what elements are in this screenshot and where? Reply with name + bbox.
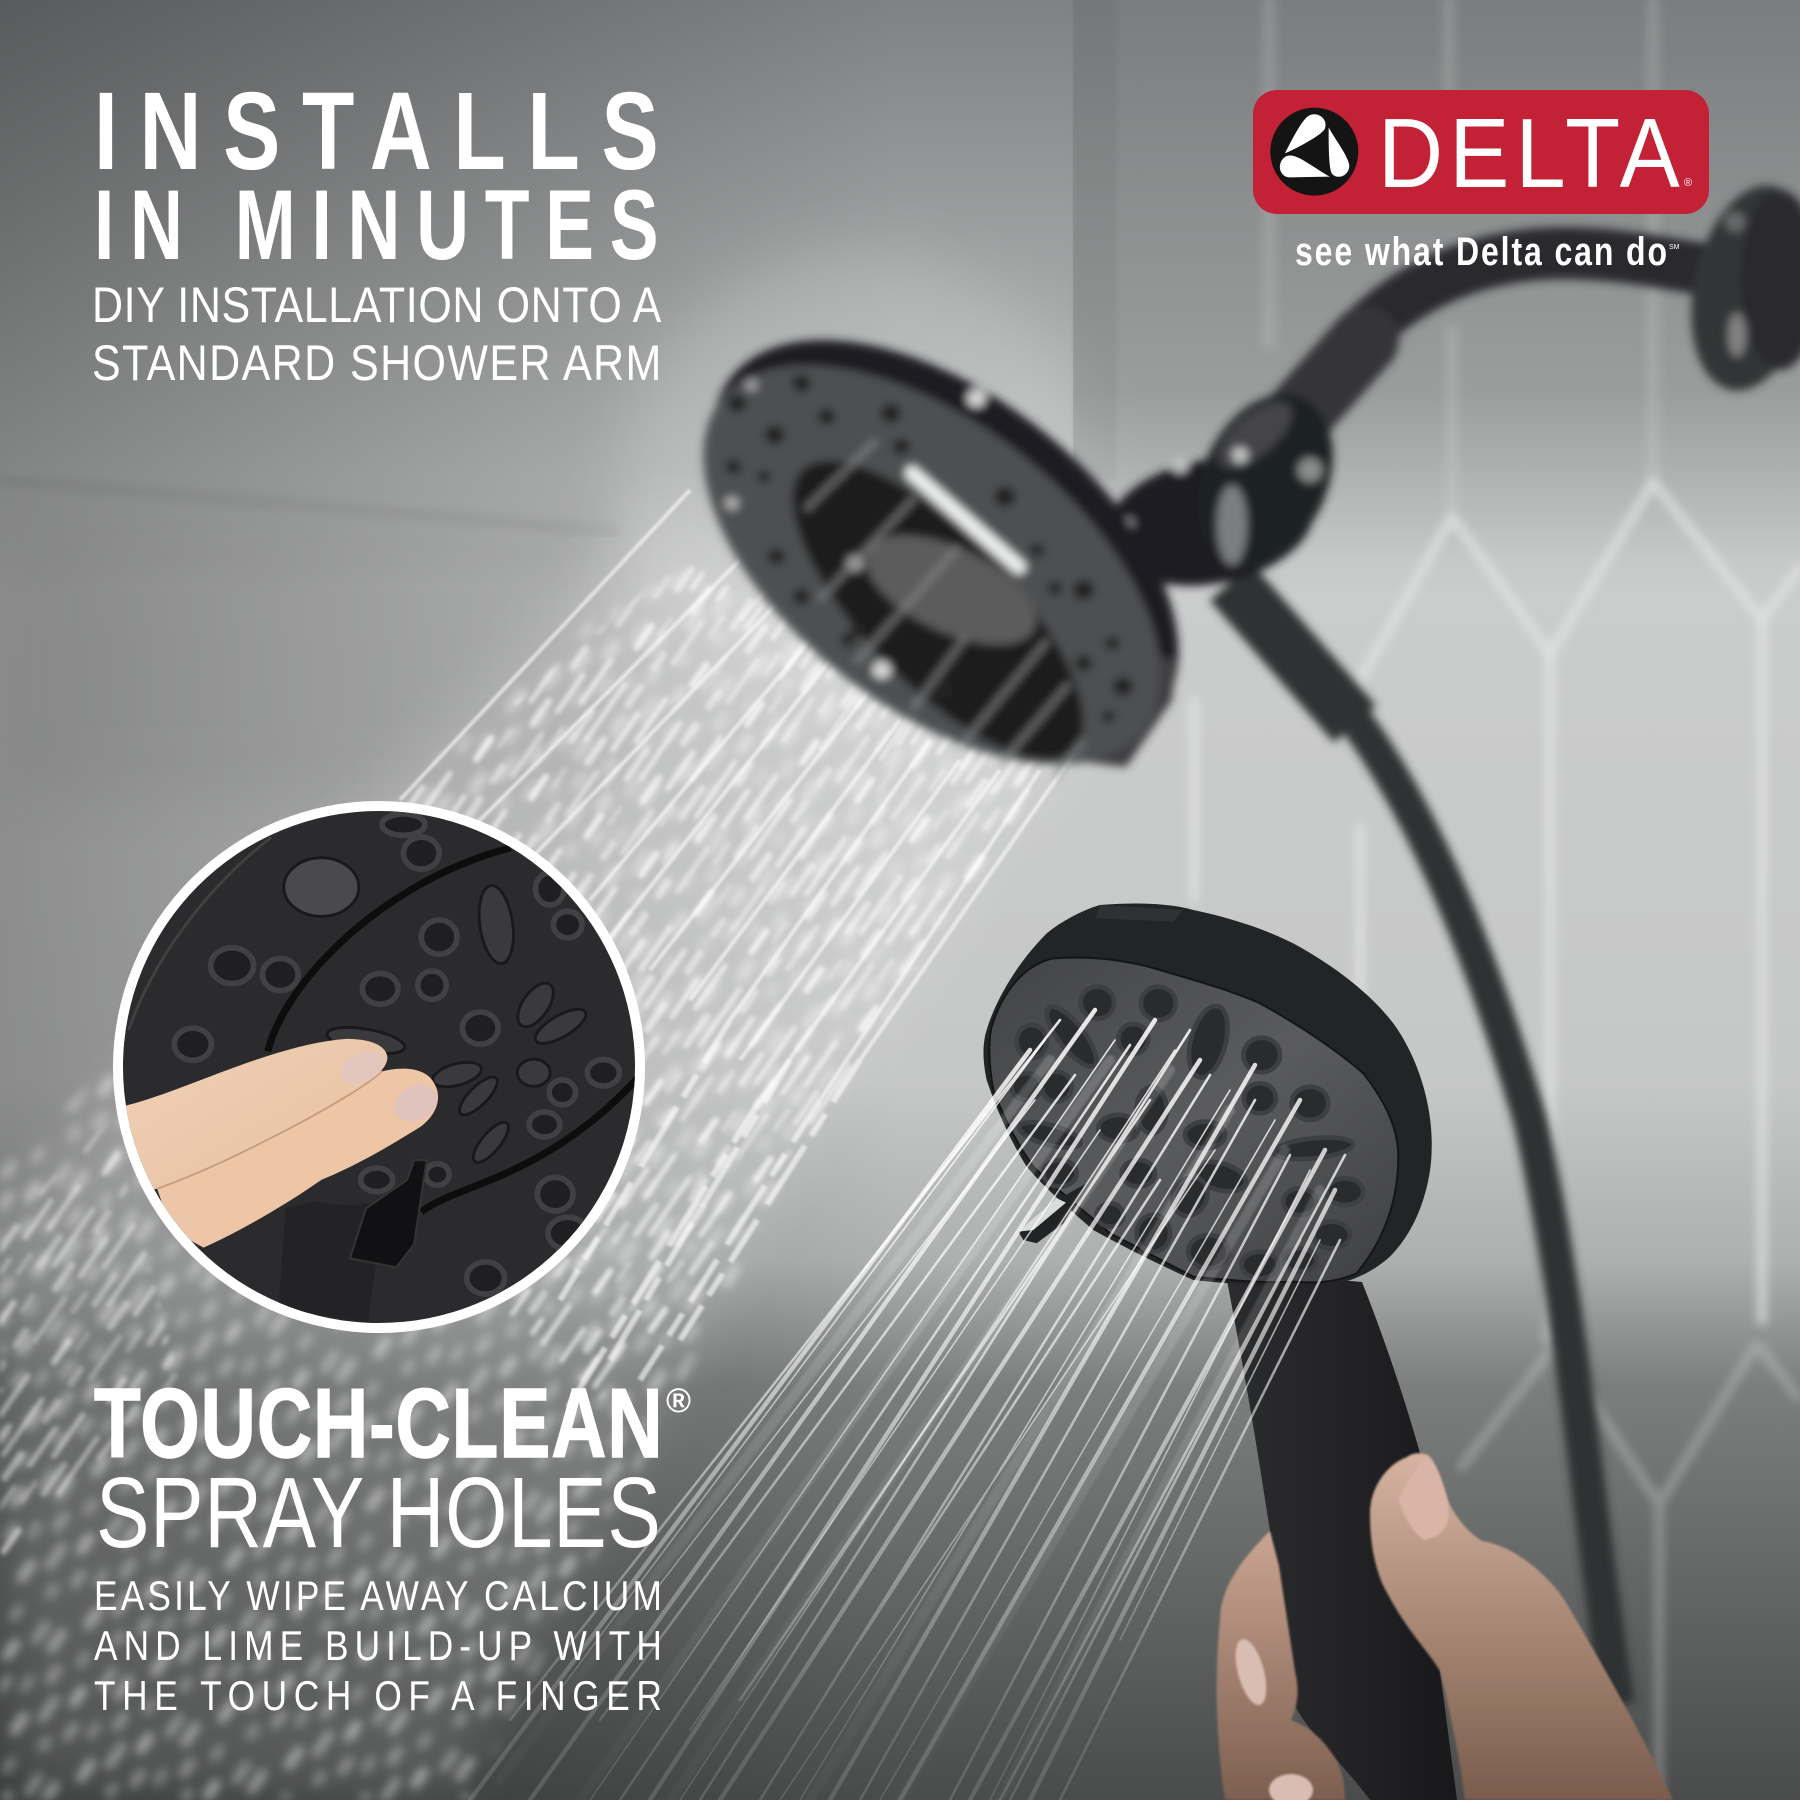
collar <box>1290 340 1365 425</box>
fingers <box>1217 1531 1345 1800</box>
body text: wipe away build-up <box>94 1573 662 1720</box>
hose connector sleeve <box>1231 582 1355 724</box>
circular inset: finger wiping spray holes <box>110 800 650 1340</box>
tagline: see what Delta can do <box>1295 229 1667 274</box>
thumb nail <box>1399 1458 1448 1540</box>
Delta logo <box>1253 90 1709 214</box>
heading: touch-clean spray holes: SPRAY HOLES <box>96 1458 661 1569</box>
inset face grooves <box>268 848 643 1212</box>
wall tile lattice <box>1073 0 1800 1800</box>
inset lever <box>350 1160 427 1267</box>
head outer shell <box>984 903 1432 1287</box>
subheading: DIY installation <box>92 277 661 391</box>
overhead shower head <box>633 174 1800 1705</box>
heading: installs in minutes <box>94 70 659 281</box>
fingers on the spray face <box>121 1039 444 1248</box>
inset oval spray holes <box>284 858 591 1167</box>
swivel mount <box>1096 372 1359 601</box>
wordmark: DELTA <box>1378 99 1680 208</box>
water spray from overhead shower head <box>0 490 1080 1800</box>
body text: wipe away build-up: AND LIME BUILD-UP WITH <box>94 1623 662 1670</box>
inset nozzles <box>174 814 619 1294</box>
water spray from handheld head <box>470 1010 1345 1800</box>
hand holding the handle <box>1217 1453 1673 1800</box>
finger nails <box>1230 1636 1313 1800</box>
heading: installs in minutes: IN MINUTES <box>94 170 659 281</box>
nozzles <box>1012 987 1363 1278</box>
heading: touch-clean spray holes: TOUCH-CLEAN <box>94 1368 663 1478</box>
Delta logo: ® <box>1684 177 1692 189</box>
tagline: SM <box>1669 244 1680 251</box>
heading: touch-clean spray holes: ® <box>666 1382 691 1420</box>
wall flange <box>1674 174 1800 402</box>
head spray face <box>989 957 1398 1282</box>
head rim and face <box>633 259 1252 842</box>
subheading: DIY installation: DIY INSTALLATION ONTO A <box>92 277 661 333</box>
flexible hose <box>1340 700 1618 1705</box>
body text: wipe away build-up: THE TOUCH OF A FINGER <box>94 1673 662 1720</box>
icon: Delta triangle mark <box>1270 108 1358 196</box>
handheld shower head <box>984 903 1432 1287</box>
spray selector lever <box>1018 1183 1087 1243</box>
heading: installs in minutes: INSTALLS <box>94 70 659 192</box>
thumb <box>1370 1453 1673 1800</box>
body text: wipe away build-up: EASILY WIPE AWAY CALCIUM <box>94 1573 662 1620</box>
heading: touch-clean spray holes <box>94 1368 691 1569</box>
handheld shower handle <box>1225 1270 1457 1800</box>
shower arm <box>1320 253 1720 385</box>
subheading: DIY installation: STANDARD SHOWER ARM <box>92 335 661 391</box>
